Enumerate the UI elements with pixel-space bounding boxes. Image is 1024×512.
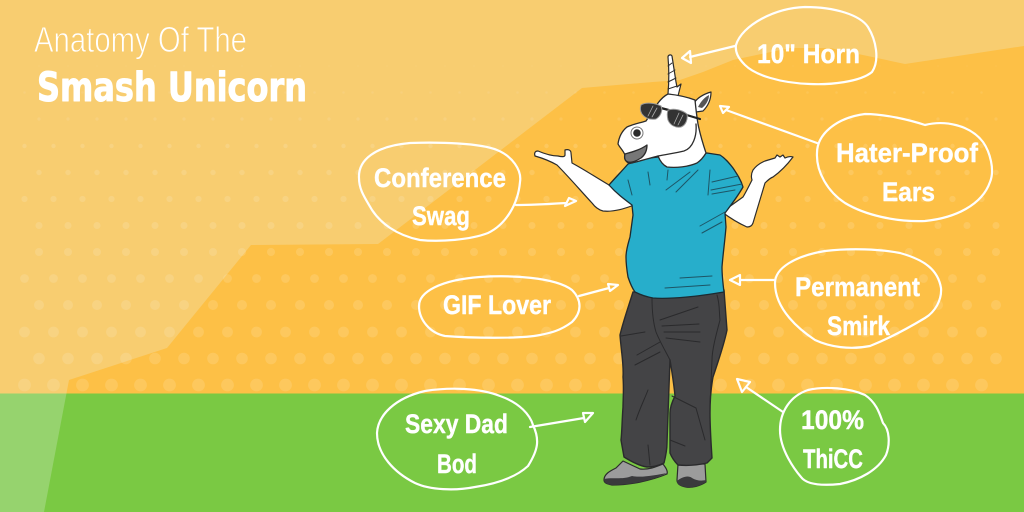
callout: 100% thicc: 100% bbox=[801, 405, 864, 435]
left lens bbox=[640, 103, 662, 119]
trousers bbox=[620, 290, 727, 467]
right shoe bbox=[677, 464, 706, 487]
left shoe bbox=[604, 461, 667, 485]
nostril bbox=[631, 127, 643, 139]
inner ear bbox=[698, 95, 709, 108]
horn bbox=[668, 55, 681, 96]
left shoe sole bbox=[604, 473, 667, 485]
left arm bbox=[535, 150, 634, 211]
shirt wrinkles bbox=[628, 170, 742, 288]
callout: conference swag: Swag bbox=[412, 201, 470, 231]
callout: sexy dad bod: Bod bbox=[437, 449, 477, 479]
callout: permanent smirk bbox=[730, 249, 941, 348]
unicorn head bbox=[618, 94, 706, 167]
jaw line bbox=[658, 124, 696, 156]
right lens bbox=[667, 109, 687, 127]
horn stripes bbox=[668, 63, 677, 89]
sunglasses bbox=[640, 103, 700, 127]
callout: sexy dad bod bbox=[377, 389, 593, 489]
right arm bbox=[722, 155, 793, 227]
callout: 100% thicc bbox=[737, 379, 889, 485]
callout: permanent smirk: Smirk bbox=[827, 311, 891, 341]
callout: conference swag bbox=[359, 143, 576, 241]
right shoe sole bbox=[677, 477, 706, 487]
title line 1: Anatomy Of The bbox=[34, 19, 247, 60]
callout: 100% thicc: ThiCC bbox=[803, 444, 863, 474]
mouth bbox=[625, 145, 647, 162]
callout: hater-proof ears: Hater-Proof bbox=[836, 138, 979, 168]
ear bbox=[694, 92, 711, 112]
ground bbox=[0, 394, 1024, 512]
title bbox=[34, 19, 307, 111]
callout: gif lover bbox=[419, 276, 618, 338]
callout: 10 inch horn bbox=[682, 7, 876, 84]
callout: gif lover: GIF Lover bbox=[443, 290, 551, 320]
callout: conference swag: Conference bbox=[374, 163, 506, 193]
t-shirt bbox=[609, 153, 743, 298]
callout: permanent smirk: Permanent bbox=[795, 272, 920, 302]
trouser creases bbox=[621, 295, 720, 465]
callout: 10 inch horn: 10" Horn bbox=[757, 39, 860, 69]
callout: sexy dad bod: Sexy Dad bbox=[405, 409, 508, 439]
title line 2: Smash Unicorn bbox=[37, 65, 307, 111]
callout: hater-proof ears: Ears bbox=[882, 177, 935, 207]
unicorn figure bbox=[535, 55, 793, 487]
callout: hater-proof ears bbox=[720, 106, 992, 221]
